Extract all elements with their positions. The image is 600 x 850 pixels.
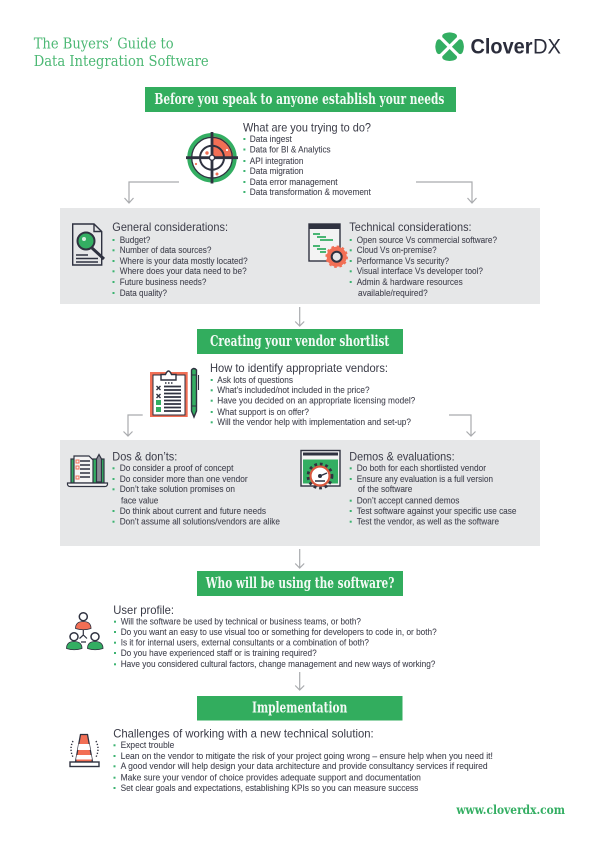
text block: technical considerations: Visual interface Vs developer tool? [357,266,483,276]
text block: dos and don'ts: Do consider a proof of concept [120,463,234,473]
text block: what are you trying to do: What are you trying to do? [243,120,371,134]
icon: target [186,132,238,184]
text block: general considerations: Future business needs? [120,277,206,287]
text block: how to identify appropriate vendors [210,361,415,427]
banner: implementation [197,696,402,720]
text block: user profile [113,603,437,669]
title: Data Integration Software [34,54,209,70]
text block: demos and evaluations: Ensure any evaluation is a full version [357,474,493,484]
text block: demos and evaluations: Do both for each shortlisted vendor [357,463,486,473]
text block: dos and don'ts: Dos & don’ts: [112,450,177,464]
banner: vendor shortlist: Creating your vendor shortlist [210,333,390,350]
text block: how to identify appropriate vendors: What’s included/not included in the price? [217,385,370,395]
text block: what are you trying to do: API integration [250,156,303,166]
text block: general considerations [112,220,248,298]
text block: challenges of working with a new technical solution: A good vendor will help design your data architecture and provide consultancy services if required [121,761,488,771]
text block: how to identify appropriate vendors: Will the vendor help with implementation and set-up? [217,417,411,427]
text block: dos and don'ts: Do consider more than one vendor [120,474,248,484]
text block: demos and evaluations: Test software against your specific use case [357,506,516,516]
text block: dos and don'ts: Don’t assume all solutions/vendors are alike [120,516,280,526]
text block: user profile: Is it for internal users, external consultants or a combination of both? [121,638,369,648]
logo: CloverDX [435,32,561,61]
arrow: down to who will be using the software [295,549,304,568]
logo: CloverDX: DX [533,36,561,59]
text block: dos and don'ts [112,450,280,526]
text block: demos and evaluations [349,450,516,526]
text block: technical considerations [349,220,497,298]
text block: demos and evaluations: of the software [358,484,412,494]
icon: document with magnifier [73,224,104,265]
banner: implementation: Implementation [252,700,348,716]
text block: user profile: Will the software be used by technical or business teams, or both? [121,616,361,626]
banner: who will be using the software [197,571,403,596]
text block: challenges of working with a new technical solution: Expect trouble [121,740,174,750]
arrow: right branch to demos and evaluations [449,415,476,436]
arrow: down to vendor shortlist [295,307,304,326]
icon: traffic cone [70,734,99,766]
text block: general considerations: Where is your data mostly located? [120,256,248,266]
banner: establish your needs: Before you speak to anyone establish your needs [154,91,444,108]
text block: dos and don'ts: Don’t take solution promises on [120,484,235,494]
text block: user profile: Have you considered cultural factors, change management and new ways of working? [121,659,435,669]
text block: demos and evaluations: Demos & evaluations: [349,450,455,464]
icon: clipboard and pen [150,368,198,417]
text block: how to identify appropriate vendors: What support is on offer? [217,407,309,417]
text block: how to identify appropriate vendors: Have you decided on an appropriate licensing model? [217,396,415,406]
text block: demos and evaluations: Don’t accept canned demos [357,496,460,506]
title [34,37,209,70]
text block: general considerations: Where does your data need to be? [120,266,247,276]
text block: challenges of working with a new technical solution: Make sure your vendor of choice provides adequate support and documentation [121,772,421,782]
banner: who will be using the software: Who will be using the software? [205,575,394,592]
arrow: down to implementation [295,672,304,690]
text block: challenges of working with a new technical solution [113,727,493,793]
text block: what are you trying to do: Data migration [250,166,303,176]
text block: technical considerations: Open source Vs commercial software? [357,235,497,245]
title: The Buyers’ Guide to [34,37,174,53]
text block: challenges of working with a new technical solution: Set clear goals and expectations, establishing KPIs so you can measure success [121,783,419,793]
text block: general considerations: General considerations: [112,220,228,234]
icon: user profile team [66,613,103,650]
panel: dos and demos [60,440,540,546]
text block: technical considerations: Cloud Vs on-premise? [357,245,437,255]
text block: how to identify appropriate vendors: How to identify appropriate vendors: [210,361,388,375]
icon: laptop with checklist [68,454,108,486]
text block: technical considerations: Technical considerations: [349,220,472,234]
text block: demos and evaluations: Test the vendor, as well as the software [357,516,499,526]
text block: what are you trying to do [243,120,371,197]
text block: user profile: Do you want an easy to use visual too or something for developers to code in, or both? [121,627,437,637]
text block: user profile: Do you have experienced staff or is training required? [121,648,317,658]
logo: CloverDX: Clover [470,36,532,59]
text block: general considerations: Data quality? [120,288,167,298]
text block: dos and don'ts: Do think about current and future needs [120,506,267,516]
panel: considerations [60,208,540,304]
text block: what are you trying to do: Data transformation & movement [250,187,371,197]
text block: what are you trying to do: Data for BI & Analytics [250,144,331,154]
text block: technical considerations: Admin & hardware resources [357,277,463,287]
text block: general considerations: Budget? [120,235,150,245]
text block: what are you trying to do: Data error management [250,177,338,187]
banner: establish your needs [145,87,456,112]
arrow: left branch to dos and don'ts [124,415,143,436]
text block: what are you trying to do: Data ingest [250,134,292,144]
text block: technical considerations: Performance Vs security? [357,256,449,266]
text block: general considerations: Number of data sources? [120,245,211,255]
icon: window with gauge gear [301,450,340,488]
icon: code window with gear [309,224,347,267]
text block: how to identify appropriate vendors: Ask lots of questions [217,375,294,385]
banner: vendor shortlist [197,329,403,354]
arrow: left branch to general considerations [124,182,179,203]
text block: technical considerations: available/required? [358,288,428,298]
text block: dos and don'ts: face value [121,496,158,506]
text block: user profile: User profile: [113,603,174,617]
text block: challenges of working with a new technical solution: Challenges of working with a new technical solution: [113,727,374,741]
footer: website url: www.cloverdx.com [456,803,565,817]
text block: challenges of working with a new technical solution: Lean on the vendor to mitigate the risk of your project going wrong – ensure help when you need it! [121,751,493,761]
arrow: right branch to technical considerations [416,182,476,203]
